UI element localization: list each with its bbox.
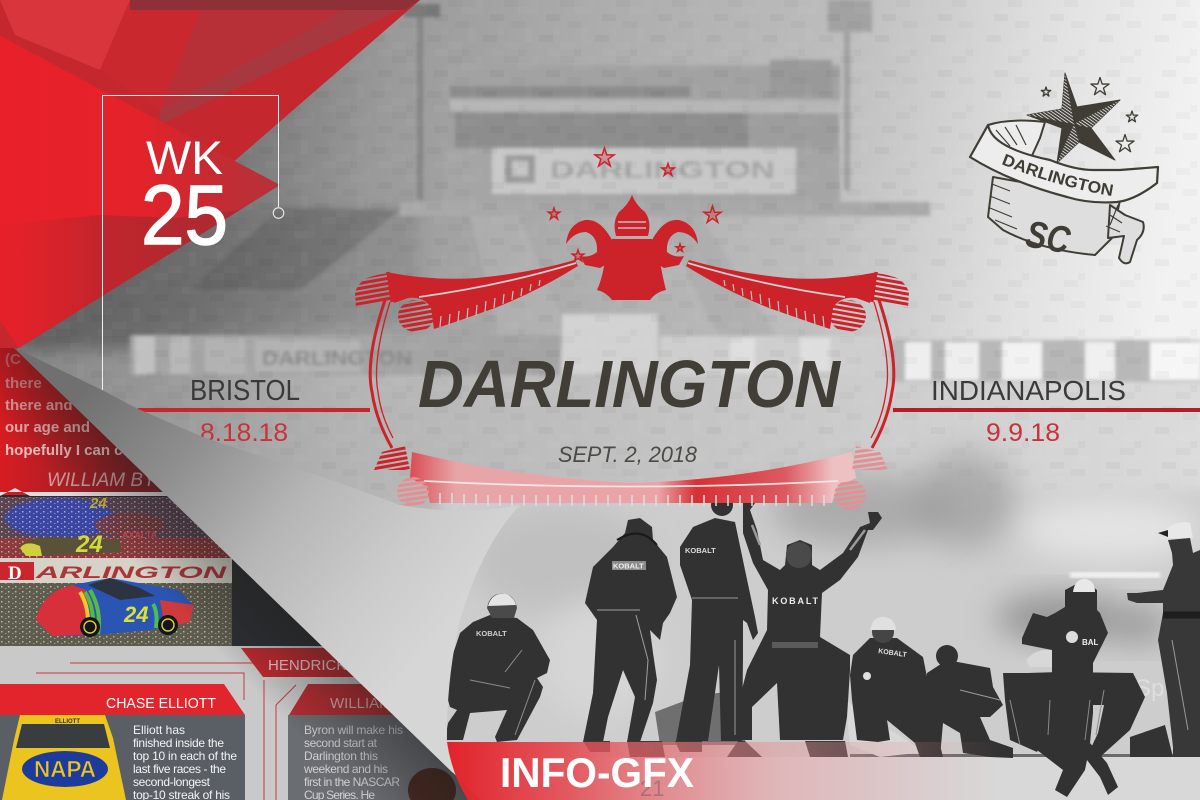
lower signage row [130, 335, 560, 375]
pit crew figures [443, 491, 1200, 797]
grandstand windows [455, 113, 839, 148]
underpage: dark strip right of paintings [232, 497, 352, 647]
crew member: bent behind [1003, 672, 1145, 757]
William Byron panel: second start at [304, 736, 378, 750]
William Byron panel: Byron will make his [304, 723, 403, 737]
emblem: lower curtain fading into smoke [374, 446, 888, 510]
crew member: crouching left: KOBALT [476, 629, 507, 638]
kit bag on pit wall [1130, 725, 1173, 757]
crew member: kneeling right [925, 645, 1013, 758]
Napa car [2, 715, 126, 800]
next race: Indianapolis: INDIANAPOLIS [931, 375, 1126, 406]
William Byron panel: Darlington this [304, 749, 378, 763]
crew member: crouching left [443, 594, 550, 742]
Chase Elliott panel: CHASE ELLIOTT [106, 695, 216, 712]
badge: star [1027, 73, 1120, 163]
underpage: red quote panel: (C [5, 351, 21, 368]
William Byron panel: WILLIAM [330, 695, 392, 712]
William Byron panel [288, 684, 478, 800]
underpage: upper car painting: 24 [75, 531, 103, 558]
underpage: red quote panel: WILLIAM BYRON [47, 470, 198, 491]
wall [440, 757, 1200, 800]
crew member: standing with headset [583, 518, 677, 742]
underpage: red quote panel: hopefully I can c [5, 442, 123, 459]
underpage: DARLINGTON wall lettering: ARLINGTON [34, 563, 227, 582]
underpage: shadow near fold [0, 340, 490, 800]
crew member: helmet on wall: BAL [1082, 638, 1099, 647]
shadowed underpage: previous infographic [0, 340, 490, 800]
crew member: tall standing: KOBALT [685, 546, 716, 555]
car remains [655, 690, 745, 745]
Napa car: NAPA [34, 756, 96, 782]
William Byron panel: weekend and his [303, 762, 388, 776]
Hendrick tab: HENDRICK [268, 657, 346, 674]
crew member: arms raised: KOBALT [772, 596, 818, 606]
emblem: right curtain [686, 260, 909, 448]
roof bands [400, 202, 930, 216]
next race: Indianapolis: 9.9.18 [986, 419, 1060, 447]
week number: WK [146, 131, 223, 184]
previous race: Bristol: BRISTOL [190, 375, 300, 407]
underpage: DARLINGTON wall lettering [0, 558, 232, 584]
crew boots [583, 741, 848, 757]
William Byron panel: first in the NASCAR [304, 775, 400, 789]
emblem: left curtain [355, 260, 578, 448]
underpage: upper car painting [0, 495, 232, 559]
crew member: arms raised [740, 497, 882, 740]
badge: hatch lines [990, 125, 1122, 232]
background: blurred stadium grandstand: DARLINGTON [262, 348, 412, 370]
photo: smoke and track wall behind the crew: Sp [1135, 675, 1164, 702]
week label frame [102, 96, 284, 390]
photo: smoke and track wall behind the crew [440, 452, 1200, 800]
week number [141, 131, 228, 262]
underpage: upper car painting: AXALTA [122, 530, 158, 540]
Chase Elliott panel: last five races - the [133, 762, 226, 776]
underpage: red quote panel: our age and [5, 419, 90, 436]
crew member: helmet on wall [1022, 579, 1118, 797]
badge: Darlington SC star and ribbon [968, 72, 1160, 264]
Chase Elliott panel: second-longest [133, 775, 211, 789]
page curl flap [13, 347, 520, 773]
Darlington emblem [355, 148, 909, 510]
Chase Elliott panel [0, 684, 245, 800]
badge: back ribbon [988, 121, 1045, 168]
underpage: red quote panel: there and [5, 397, 73, 414]
crew member: kneeling centre [850, 617, 943, 757]
underpage: team section [0, 646, 490, 800]
light towers [417, 10, 423, 200]
top-left red triangles [0, 0, 420, 348]
next race: Indianapolis [893, 375, 1200, 447]
race date: SEPT. 2, 2018 [558, 442, 698, 467]
badge: small stars [1041, 78, 1138, 152]
Napa car: ELLIOTT [55, 719, 80, 725]
Chase Elliott panel: Elliott has [133, 723, 185, 737]
background: blurred stadium grandstand: DARLINGTON [550, 157, 775, 184]
grandstand upper band [445, 65, 840, 100]
badge: SC: SC [1022, 214, 1074, 263]
badge: Darlington SC star and ribbon: DARLINGTON [1002, 154, 1114, 196]
INFO-GFX bottom banner: INFO-GFX [500, 749, 694, 796]
emblem: stars [548, 148, 721, 261]
Chase Elliott panel: finished inside the [133, 736, 224, 750]
underpage: red quote panel: there [5, 375, 42, 392]
main title: DARLINGTON [418, 347, 842, 422]
crew member: kneeling centre: KOBALT [878, 648, 908, 659]
previous race: Bristol [138, 375, 370, 447]
emblem: crest [566, 195, 698, 300]
Chase Elliott panel: top 10 in each of the [133, 749, 237, 763]
badge: front banner [970, 125, 1158, 202]
crew member: standing far right [1127, 522, 1200, 757]
underpage: upper car painting: 24 [89, 495, 107, 512]
underpage: rainbow 24 car painting [0, 578, 232, 646]
week number: 25 [141, 168, 228, 262]
Hendrick tab [241, 648, 360, 677]
underpage: rainbow 24 car painting: 24 [123, 602, 148, 627]
crew member: standing with headset: KOBALT [613, 562, 644, 570]
underpage: red quote panel [0, 348, 167, 496]
INFO-GFX bottom banner [447, 742, 1000, 800]
sign [445, 148, 840, 202]
underpage: DARLINGTON wall lettering: D [8, 563, 22, 584]
previous race: Bristol: 8.18.18 [200, 419, 288, 447]
crew member: tall standing [676, 491, 758, 741]
